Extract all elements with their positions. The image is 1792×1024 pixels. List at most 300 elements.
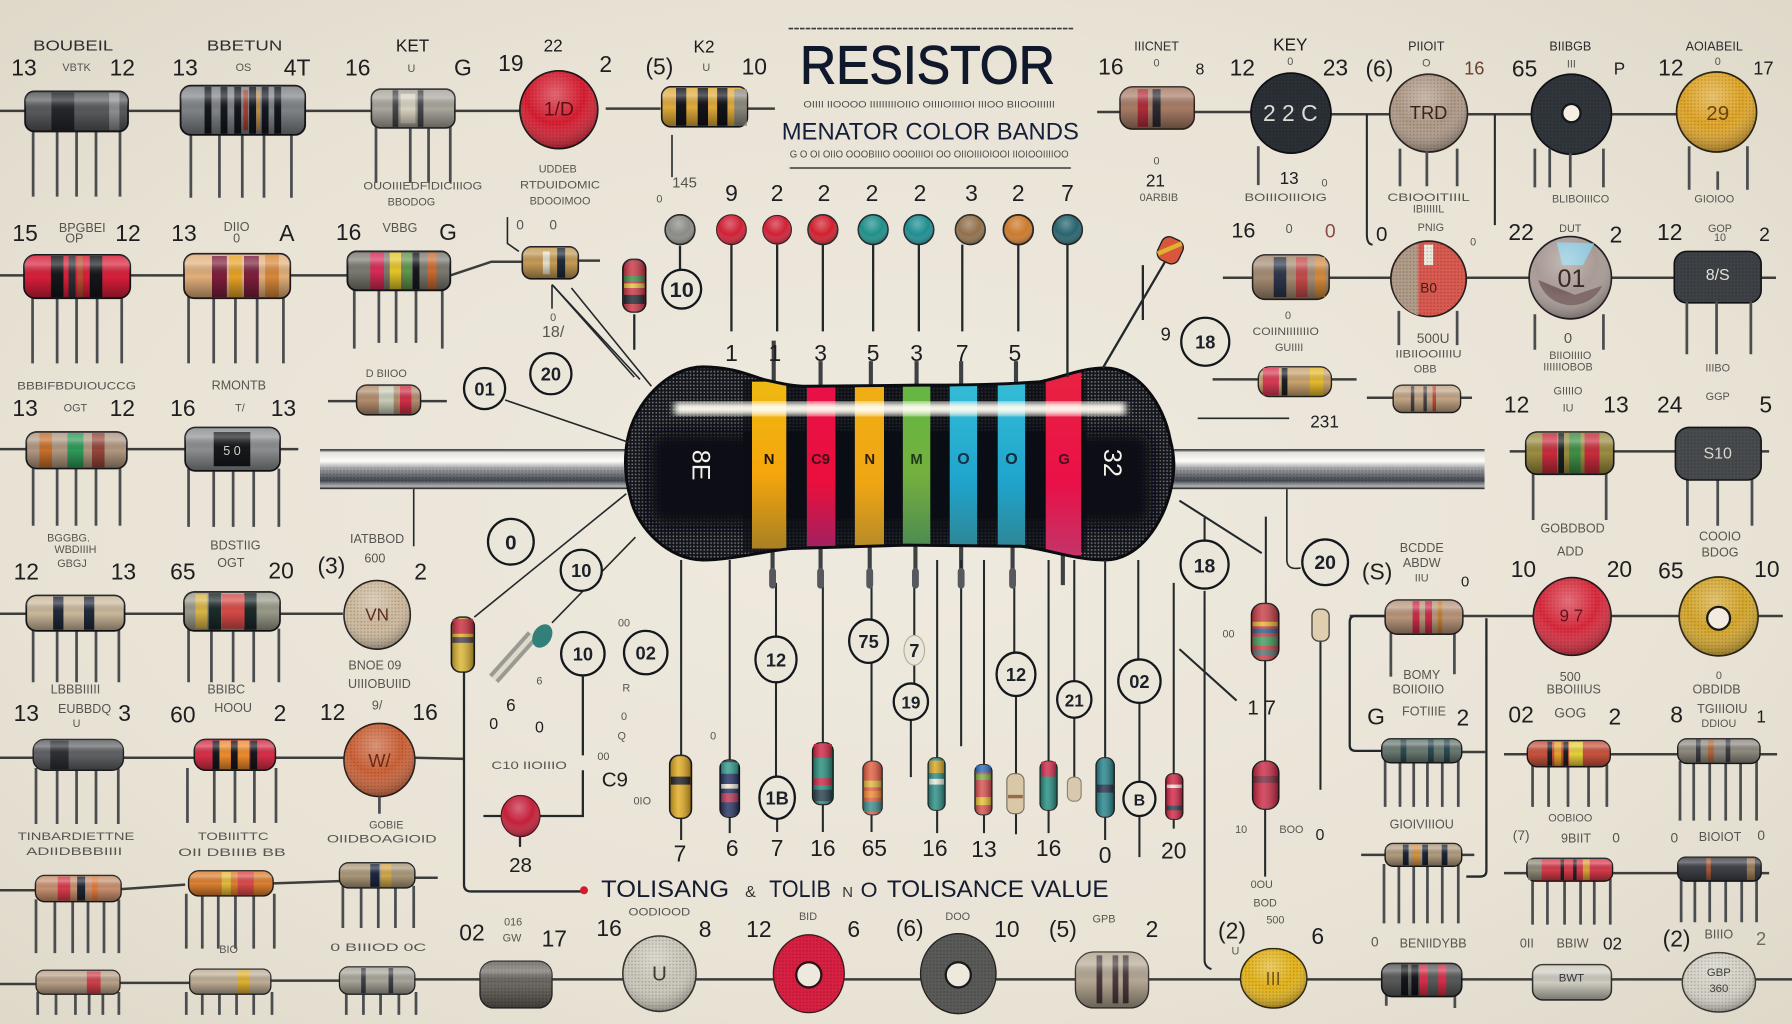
small labels: BPGBEI (59, 221, 106, 235)
small horizontal resistor (328, 385, 447, 415)
resistor small pink (36, 970, 120, 1015)
numbers: 6 (847, 916, 860, 942)
resistor blue gold (1384, 843, 1462, 923)
lollipop numbers: 2 (914, 180, 926, 206)
numbers: 2 (274, 700, 286, 726)
body labels: 32 (1098, 449, 1126, 477)
panel: right row 4 (1179, 501, 1783, 969)
numbers: 231 (1310, 411, 1339, 431)
resistor rainbow (347, 251, 450, 349)
numbers: 7 (771, 835, 784, 861)
lollipop red head (808, 215, 838, 245)
small labels: GBGJ (57, 558, 87, 570)
small labels: BOO (1279, 824, 1303, 836)
small labels: OIIDBOAGIOID (327, 833, 437, 845)
dark capacitor (1675, 427, 1761, 526)
small labels: WBDIIIH (54, 544, 97, 556)
small labels: TOBIIITTC (198, 831, 269, 843)
panel: lower centre pins (670, 560, 1186, 868)
small labels (1554, 385, 1730, 414)
small labels: GOBIE (369, 820, 403, 832)
dark disc: 2 2 C (1263, 100, 1318, 126)
small labels: BIIIO (1705, 927, 1733, 941)
numbers: 15 (12, 220, 38, 246)
small labels: OGT (217, 556, 245, 570)
headings: KET (396, 35, 430, 55)
small labels: BOMY (1403, 668, 1441, 682)
numbers: 2 (1146, 916, 1158, 942)
numbers: 0 (535, 720, 544, 737)
small labels: FOTIIIE (1402, 704, 1446, 718)
small labels (17, 368, 407, 570)
tall resistor green red (1040, 761, 1057, 810)
panel: main resistor (320, 340, 1485, 585)
body pin numbers: 7 (956, 340, 969, 366)
tall resistor orange (863, 761, 882, 815)
grey disc: U (652, 963, 667, 986)
small labels: 10 (1714, 232, 1726, 244)
bracket connector (1350, 616, 1486, 877)
small labels: 0 (233, 231, 240, 245)
small labels: 0 BIIIOD 0C (330, 942, 427, 954)
wire (0, 878, 438, 890)
small labels: BDOOIMOO (530, 196, 590, 208)
callout circle (464, 368, 505, 409)
headings: PIIOIT (1408, 39, 1445, 53)
panel: left row 6 (0, 863, 438, 956)
icon: dart probe (494, 621, 556, 679)
leads (1399, 302, 1751, 354)
lollipop orange head (1003, 215, 1033, 245)
tall resistor teal yellow (928, 758, 945, 810)
numbers: 13 (1280, 168, 1299, 188)
connector lines (507, 217, 640, 379)
wire (1350, 615, 1783, 617)
wire (1510, 450, 1769, 453)
numbers: 16 (170, 395, 196, 421)
numbers: 0 (1099, 842, 1112, 868)
small labels (62, 62, 710, 209)
callout circle (894, 683, 928, 720)
numbers: 20 (268, 557, 294, 583)
small labels near connector: 0 (656, 193, 662, 205)
resistor grey (25, 91, 128, 197)
leads (1258, 146, 1747, 190)
small labels: 0 (1287, 56, 1293, 68)
body labels: G (1058, 452, 1070, 468)
callout circle: 20 (541, 364, 561, 385)
dark capacitor (1674, 251, 1761, 303)
numbers: 6 (726, 835, 739, 861)
wire (0, 613, 343, 615)
pin bulbs under the body (773, 571, 1013, 585)
yellow black resistor (662, 87, 747, 127)
callout circle: 12 (766, 649, 786, 670)
orange band (752, 382, 786, 549)
small labels (51, 532, 411, 697)
tolerance value heading: TOLISANCE VALUE (887, 876, 1109, 903)
orange disc (344, 723, 415, 797)
small labels: 0 (1470, 237, 1476, 249)
small labels: BBODOG (388, 197, 435, 209)
connector (464, 671, 583, 891)
red disc: 1/D (544, 98, 574, 120)
orange disc: W/ (368, 750, 392, 771)
small labels: VBBG (383, 221, 417, 235)
numbers: 2 (1610, 221, 1622, 247)
resistor dark grey (33, 739, 123, 824)
numbers: 2 (414, 558, 427, 584)
body pin numbers: 1 (725, 340, 738, 366)
small labels: 00 (1223, 629, 1235, 641)
tan red disc (1391, 241, 1466, 317)
numbers: 16 (596, 915, 622, 941)
body pin numbers: 1 (768, 340, 781, 366)
small labels near connector (656, 175, 697, 205)
headings: IIICNET (1134, 39, 1179, 53)
numbers: 22 (1508, 219, 1534, 245)
panel: top right row 1 (1097, 34, 1774, 245)
numbers: 23 (1323, 54, 1348, 80)
callout circle: 1B (765, 788, 789, 809)
small labels: 6 (536, 676, 542, 688)
numbers: 28 (509, 854, 532, 877)
wire (0, 448, 298, 450)
small labels: U (408, 63, 415, 75)
small labels: CBIOOITIIIL (1387, 192, 1470, 204)
small labels: BLIBOIIICO (1552, 193, 1609, 205)
small labels: OBB (1414, 364, 1437, 376)
body labels: N (764, 452, 775, 468)
small labels: U (702, 62, 710, 74)
numbers (1603, 925, 1766, 954)
panel: right row 2 (1161, 218, 1776, 376)
small labels: GOBDBOD (1540, 522, 1605, 536)
top lollipop pin row (662, 180, 1082, 377)
cyan band two (998, 383, 1025, 550)
numbers: 16 (345, 54, 370, 80)
numbers: 16 (1231, 218, 1255, 243)
small labels: 18/ (542, 324, 565, 341)
numbers: 16 (810, 835, 836, 861)
numbers: 2 (1456, 705, 1469, 731)
wire (1361, 855, 1769, 873)
callout circle: B (1134, 793, 1145, 810)
title block (782, 29, 1079, 168)
small oval tag (904, 635, 925, 665)
small labels: IIBIIOOIIIIU (1395, 349, 1462, 361)
small labels (1235, 824, 1733, 950)
numbers: 0 (1376, 223, 1387, 246)
callout circle (1057, 681, 1091, 718)
small labels: 0 (1154, 156, 1160, 168)
pale disc (1682, 953, 1755, 1012)
small labels (1540, 522, 1741, 560)
small labels: IBIIIIIL (1413, 204, 1444, 216)
numbers: 13 (11, 54, 37, 80)
numbers: 12 (1657, 219, 1682, 245)
numbers: 12 (110, 54, 135, 80)
small labels: T/ (235, 402, 246, 414)
small labels (1223, 541, 1741, 719)
numbers: 19 (498, 50, 524, 76)
numbers: 7 (674, 841, 686, 867)
callout circle (1118, 659, 1161, 703)
small labels: OUOIIIEDFIDICIIIOG (363, 181, 482, 193)
small labels: BIIOIIIIO (1549, 350, 1591, 362)
numbers: 20 (1607, 556, 1632, 582)
numbers: 13 (172, 54, 198, 80)
small labels: 0 (1322, 177, 1328, 189)
callout circle: 21 (1065, 690, 1084, 710)
callout circle (755, 637, 797, 682)
numbers: 02 (1508, 701, 1534, 727)
beige disc (344, 581, 410, 649)
callout circle: 0 (505, 532, 517, 555)
lollipop numbers: 2 (1012, 180, 1025, 206)
resistor red striped (1527, 858, 1613, 925)
numbers: 16 (1464, 57, 1484, 78)
small labels: U (1232, 945, 1239, 957)
wire (1223, 277, 1776, 279)
numbers: (5) (645, 53, 673, 79)
callout circle: 10 (573, 644, 593, 665)
numbers: 12 (115, 220, 141, 246)
numbers: 12 (1230, 54, 1255, 80)
small labels (18, 699, 437, 859)
wire (0, 109, 775, 111)
small labels: 0ARBIB (1140, 192, 1178, 204)
panel: left row 3 (0, 368, 447, 570)
resistor beige (26, 595, 125, 682)
dark donut (1531, 74, 1611, 154)
numbers (1098, 53, 1774, 190)
small labels: GOP (1708, 223, 1732, 235)
lollipop teal head (904, 215, 934, 245)
resistor pink (35, 875, 121, 953)
small labels: C10 IIOIIIO (491, 760, 567, 772)
callout circle (561, 550, 602, 591)
small labels: U (73, 718, 80, 730)
small labels (503, 906, 1239, 957)
numbers: P (1614, 58, 1625, 78)
panel: right row 5 (1350, 616, 1777, 877)
small labels: IATBBOD (350, 532, 404, 546)
numbers: 17 (542, 925, 567, 951)
left metal lead (320, 449, 646, 489)
yellow disc (1677, 72, 1757, 152)
small labels: 0 (1316, 827, 1325, 844)
panel: right row 6 (1235, 824, 1769, 954)
callout circle: 20 (1314, 552, 1336, 574)
headings (33, 35, 714, 57)
wire (1097, 112, 1677, 114)
small labels: R (622, 682, 630, 694)
lollipop teal head (858, 215, 888, 245)
numbers: 13 (1603, 392, 1629, 418)
red disc (1533, 578, 1611, 655)
pale disc: 360 (1709, 983, 1728, 995)
panel: bottom wire row (0, 906, 1792, 1015)
small labels: 0 (549, 218, 557, 233)
numbers (489, 695, 628, 877)
callouts by main resistor (414, 286, 667, 675)
small labels: OODIOOD (629, 906, 690, 918)
small labels: HOOU (214, 701, 252, 715)
cyan band one (950, 384, 977, 549)
red band wide (1046, 373, 1081, 555)
headings: AOIABEIL (1686, 39, 1743, 53)
small labels (1253, 222, 1732, 376)
beige disc (1390, 74, 1467, 152)
resistor dark: 5 0 (223, 444, 241, 458)
dark capacitor: S10 (1703, 445, 1732, 462)
wire (0, 979, 1792, 984)
body labels: M (910, 452, 923, 468)
panel: top left row 1 (0, 35, 775, 209)
numbers (674, 835, 1186, 868)
callout circle (1181, 541, 1229, 589)
body labels: O (1005, 451, 1018, 468)
small labels: ABDW (1403, 556, 1441, 570)
callout circle (1181, 318, 1229, 366)
lollipop numbers: 9 (725, 180, 738, 206)
tolerance value heading (601, 876, 1109, 903)
numbers: 16 (1098, 53, 1124, 79)
small labels: BID (799, 911, 817, 923)
body labels: C9 (811, 452, 830, 468)
lollipop numbers: 2 (866, 180, 878, 206)
numbers (14, 553, 427, 584)
small labels: 00 (618, 617, 630, 629)
small labels: BNOE 09 (348, 659, 401, 673)
tolerance value heading: N (842, 885, 853, 901)
numbers: (6) (896, 915, 924, 941)
small labels: BBOIIIUS (1546, 683, 1601, 697)
resistor grey capsule (480, 961, 552, 1008)
numbers: 17 (1753, 57, 1774, 78)
small labels: OS (236, 62, 251, 74)
callout circle (997, 653, 1035, 696)
resistor copper (1120, 87, 1194, 129)
tolerance value heading: O (861, 877, 877, 902)
small labels: BENIIDYBB (1400, 936, 1467, 950)
numbers (11, 50, 767, 80)
small labels: DOO (945, 911, 970, 923)
callout circle: 02 (1129, 671, 1150, 692)
numbers: 10 (742, 53, 767, 79)
numbers: (5) (1049, 916, 1077, 942)
resistor small grey (339, 967, 416, 1015)
numbers: 2 (1608, 704, 1621, 730)
numbers: 12 (746, 916, 772, 942)
lollipop numbers: 2 (771, 180, 784, 206)
small labels: IU (1563, 402, 1573, 414)
body pin numbers: 3 (910, 340, 923, 366)
small labels: BGGBG. (47, 533, 90, 545)
vertical rainbow resistor (1251, 603, 1279, 661)
connectors (1367, 114, 1495, 245)
numbers: 6 (1311, 923, 1324, 949)
small labels: 0 (1285, 310, 1291, 322)
small labels: OP (65, 231, 83, 245)
small labels: GIOIOO (1694, 193, 1734, 205)
numbers: 02 (1603, 934, 1622, 954)
lollipop numbers: 7 (1061, 180, 1074, 206)
small oval tag: 7 (909, 640, 919, 661)
small labels: 00 (597, 751, 609, 763)
callout circle (759, 777, 795, 819)
small labels: UIIIOBUIID (348, 677, 411, 691)
right metal lead (1160, 449, 1485, 489)
yellow band (855, 384, 884, 549)
numbers (12, 219, 457, 246)
resistor dark stripes (1678, 857, 1761, 922)
small labels: GIOIVIIIOU (1390, 818, 1454, 832)
red disc (520, 71, 598, 149)
resistor orange (184, 254, 290, 363)
small labels: 0 (1564, 331, 1572, 347)
numbers: 12 (1658, 54, 1684, 80)
resistor yellow orange (1527, 741, 1610, 807)
body pin numbers: 3 (814, 340, 827, 366)
leader (1198, 418, 1301, 568)
numbers: (S) (1362, 558, 1392, 584)
numbers: (2) (1663, 925, 1691, 951)
callout circle: 18 (1195, 332, 1215, 353)
small labels: DIIO (224, 220, 250, 234)
resistor orange long (186, 871, 274, 949)
body labels (687, 449, 1126, 481)
small labels: VBTK (62, 62, 91, 74)
small labels: ADD (1557, 544, 1584, 558)
numbers: 1 (1756, 706, 1766, 726)
small labels: D BIIOO (366, 368, 407, 380)
numbers: 0 (489, 716, 498, 733)
callout circle (662, 270, 701, 309)
body labels: N (864, 452, 875, 468)
panel: left row 4 (0, 532, 427, 697)
numbers: 13 (171, 220, 197, 246)
numbers: 2 (1759, 224, 1770, 246)
small labels: (7) (1513, 828, 1530, 843)
callout circle (624, 631, 667, 674)
headings: BBETUN (207, 38, 282, 54)
wire (0, 758, 464, 759)
numbers (1161, 218, 1770, 345)
body labels: 8E (687, 450, 715, 481)
resistor body (626, 368, 1172, 558)
panel: left row 5 (0, 699, 464, 859)
faint resistor (1007, 774, 1024, 814)
resistor small gold (186, 969, 272, 1015)
numbers: 8 (1196, 61, 1205, 78)
dark capacitor: 8/S (1706, 267, 1730, 284)
numbers: 10 (1754, 556, 1780, 582)
small labels: 0 (550, 312, 556, 324)
small labels: 0II (1520, 936, 1534, 950)
numbers: 6 (506, 695, 516, 715)
title: RESISTOR (800, 35, 1055, 95)
yellow disc: 29 (1706, 102, 1729, 125)
small labels: BBIBC (207, 683, 245, 697)
lollipop brown head (955, 215, 985, 245)
resistor striped dark (181, 86, 305, 198)
resistor tan blue (1253, 255, 1329, 299)
small labels: BIOIOT (1699, 830, 1742, 844)
multicolour disc: 01 (1557, 265, 1585, 293)
small labels: OGT (64, 402, 88, 414)
